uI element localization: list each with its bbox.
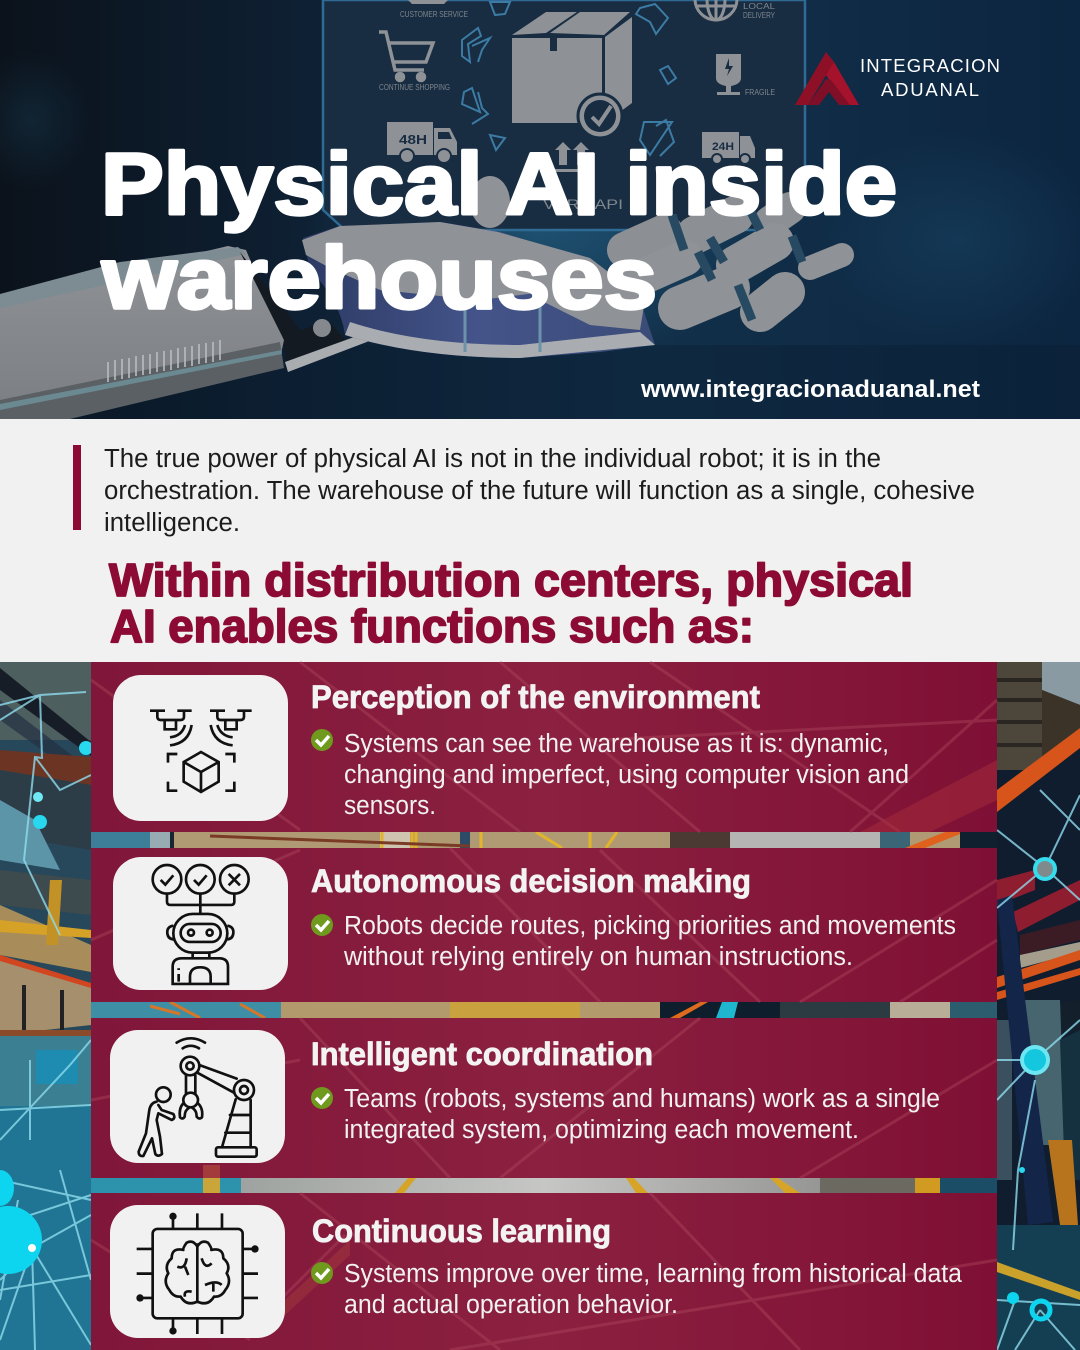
logo wordmark: ADUANAL (881, 79, 979, 100)
body text: and actual operation behavior. (344, 1291, 678, 1319)
screen small labels: DELIVERY (743, 10, 775, 20)
body text: Robots decide routes, picking priorities and movements (344, 912, 956, 940)
screen small labels: LOCAL (743, 1, 775, 11)
icon: check bullet (311, 1262, 333, 1284)
icon: delivery truck 48H: 48H (399, 132, 427, 147)
warehouse background photo (0, 662, 1080, 1350)
heading: Continuous learning (312, 1213, 611, 1249)
body text: Systems improve over time, learning from historical data (344, 1260, 963, 1288)
panel: intelligent coordination (91, 1018, 997, 1178)
accent bar (73, 445, 81, 530)
panel: perception of the environment (91, 662, 997, 832)
icon: this way up arrows (555, 142, 592, 172)
logo wordmark (860, 55, 1000, 100)
body text (344, 1260, 963, 1319)
robot fingers (625, 206, 842, 320)
logo (795, 52, 1000, 105)
body text: sensors. (344, 792, 436, 820)
icon: delivery truck 48H (387, 122, 457, 163)
intro text: The true power of physical AI is not in the individual robot; it is in the (104, 445, 881, 473)
heading: Perception of the environment (311, 679, 760, 715)
hero panel: robot hand photo (0, 0, 1080, 419)
intro text (104, 445, 975, 537)
icon card: brain chip (110, 1205, 285, 1338)
screen small labels: VERY API (543, 196, 623, 212)
screen small labels (379, 1, 775, 212)
body text: Teams (robots, systems and humans) work as a single (344, 1085, 940, 1113)
body text (344, 1085, 940, 1144)
body text: without relying entirely on human instructions. (343, 943, 853, 971)
middle warehouse scene visible in gaps (91, 832, 997, 1193)
logo wordmark: INTEGRACION (860, 55, 1000, 76)
icon: fragile glass (716, 54, 741, 95)
heading: Intelligent coordination (311, 1036, 653, 1072)
icon: check bullet (311, 914, 333, 936)
icon: check bullet (311, 1087, 333, 1109)
icon: box with check (512, 12, 632, 138)
section heading (109, 554, 913, 652)
body text (343, 912, 956, 971)
icon card: drones scanning a box (113, 675, 288, 821)
holographic screen (323, 0, 805, 230)
heading: Autonomous decision making (311, 863, 751, 899)
icon: delivery truck 24H: 24H (712, 141, 734, 153)
body text: integrated system, optimizing each movement. (344, 1116, 859, 1144)
network lines and nodes (0, 692, 1080, 1350)
intro text: orchestration. The warehouse of the future will function as a single, cohesive (104, 477, 975, 505)
icon: delivery truck 24H (702, 132, 755, 164)
right side warehouse scene (997, 662, 1080, 1350)
section heading: Within distribution centers, physical (109, 554, 913, 606)
screen small labels: CUSTOMER SERVICE (400, 9, 468, 19)
title: warehouses (101, 230, 657, 327)
screen small labels: FRAGILE (745, 87, 775, 97)
intro panel background (0, 419, 1080, 662)
title (101, 136, 897, 327)
robot arm (0, 246, 372, 419)
body text: Systems can see the warehouse as it is: dynamic, (344, 730, 889, 758)
icon: chevrons (462, 2, 676, 156)
icon: shopping cart (379, 32, 433, 80)
robot palm (302, 176, 655, 358)
icon: check bullet (311, 729, 333, 751)
logo mark (795, 52, 859, 105)
body text: changing and imperfect, using computer vision and (344, 761, 909, 789)
icon: globe (695, 0, 737, 20)
section heading: AI enables functions such as: (110, 600, 754, 652)
body text (344, 730, 909, 820)
left side warehouse scene (0, 662, 91, 1350)
icon card: robot arm and worker (110, 1030, 285, 1163)
panel: continuous learning (91, 1193, 997, 1350)
screen small labels: CONTINUE SHOPPING (379, 82, 450, 92)
icon card: robot decisions (113, 857, 288, 990)
intro text: intelligence. (104, 509, 240, 537)
panel: autonomous decision making (91, 848, 997, 1002)
title: Physical AI inside (101, 136, 897, 233)
website url: www.integracionaduanal.net (640, 376, 980, 403)
